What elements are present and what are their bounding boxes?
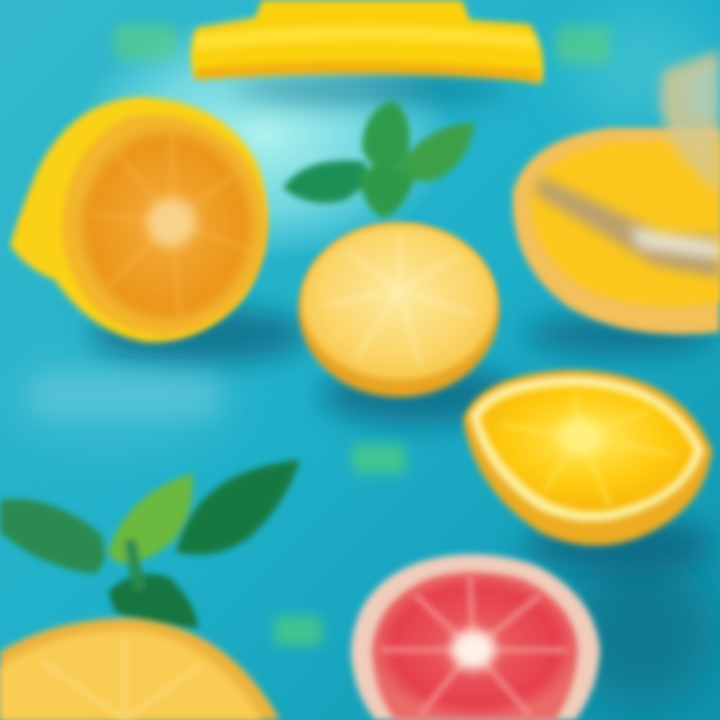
lemon: bottom left xyxy=(0,618,280,720)
small green marks xyxy=(274,444,406,646)
lemon: upper right with spoon xyxy=(513,128,720,334)
lemon: bright yellow halved right xyxy=(463,370,712,545)
honey dipper spoon xyxy=(535,176,720,278)
lemon: large halved with orange face xyxy=(10,97,267,342)
grapefruit: red halved bottom xyxy=(351,554,600,720)
banner: yellow ribbon at top xyxy=(191,0,544,84)
faint pale smudge xyxy=(30,375,220,415)
mint sprig: lower left xyxy=(0,460,300,628)
banner side marks: faint green xyxy=(114,24,610,64)
fruit shadows xyxy=(90,80,715,575)
lemon: pale halved centre xyxy=(299,223,499,397)
glass jar: top right xyxy=(660,50,720,195)
mint sprig: upper centre xyxy=(283,100,474,218)
